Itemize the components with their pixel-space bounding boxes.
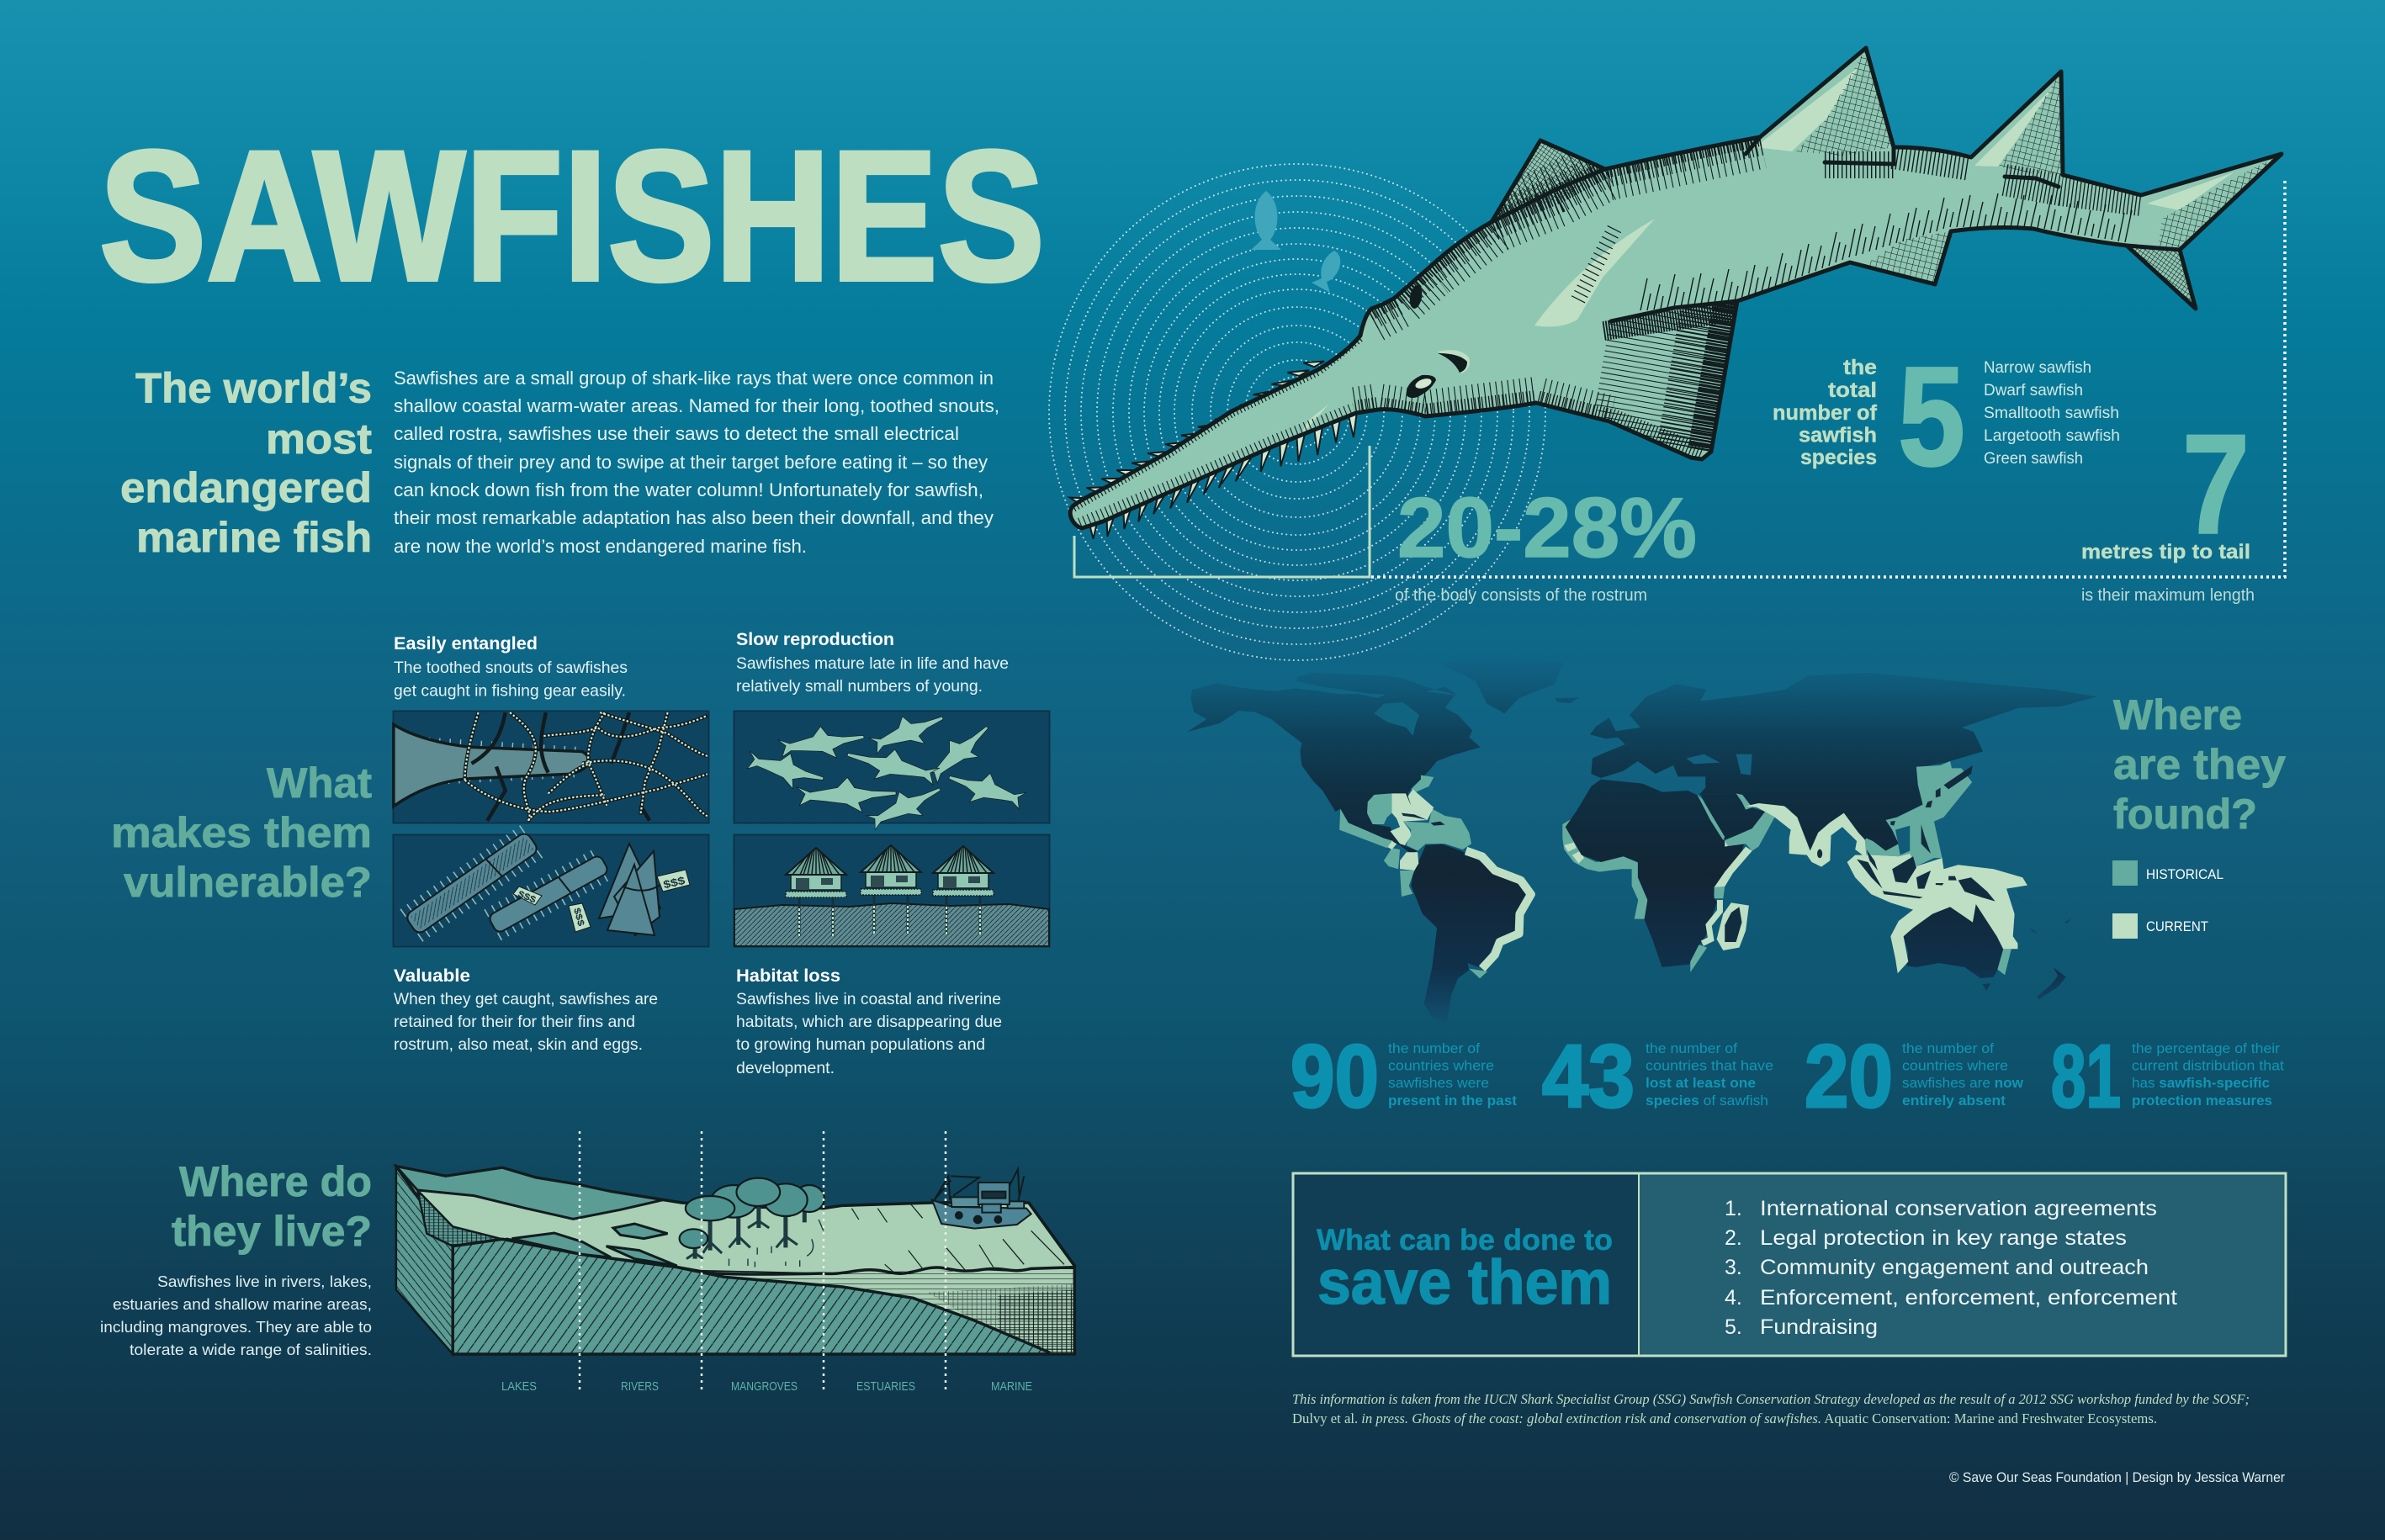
zone labels: MANGROVES [731, 1380, 798, 1394]
species names: Green sawfish [1984, 450, 2083, 468]
text: habitat description [100, 1273, 372, 1358]
text: valuable: rostrum, also meat, skin and eggs. [394, 1035, 643, 1054]
heading: the world's most endangered marine fish [120, 365, 372, 561]
text: habitat description: Sawfishes live in rivers, lakes, [157, 1273, 372, 1290]
action list: 2. [1725, 1226, 1742, 1250]
inland seas [1686, 754, 1752, 775]
action list: Community engagement and outreach [1760, 1256, 2149, 1279]
statistic: 20 countries [1805, 1027, 2023, 1126]
statistic: 20-28% rostrum: 20-28% [1397, 481, 1697, 575]
fishing boat [932, 1169, 1031, 1229]
price tags: $$$ [571, 907, 586, 927]
zone labels: ESTUARIES [856, 1380, 915, 1394]
historical range west [1339, 775, 1650, 978]
icon: small prey fish [1251, 191, 1340, 293]
text: habitat description: estuaries and shallow marine areas, [113, 1295, 372, 1313]
legend: CURRENT [2146, 918, 2208, 934]
statistic: 90 countries: present in the past [1388, 1093, 1518, 1109]
text: habitat loss: Sawfishes live in coastal and riverine [736, 990, 1001, 1008]
severed rostrum one [403, 828, 541, 938]
text: slow reproduction: Slow reproduction [736, 630, 894, 649]
species names: Smalltooth sawfish [1984, 405, 2119, 422]
statistic: 7 metres: metres tip to tail [2081, 541, 2250, 564]
heading: what makes them vulnerable: vulnerable? [124, 859, 372, 906]
diagram: habitat cross-section [396, 1167, 1074, 1354]
statistic: 90 countries: 90 [1291, 1027, 1379, 1126]
text: valuable [394, 966, 658, 1054]
species names [1984, 359, 2120, 468]
statistic: 90 countries: the number of [1388, 1041, 1480, 1056]
statistic: 81 percent [2051, 1027, 2284, 1126]
text: slow reproduction: Sawfishes mature late in life and have [736, 654, 1009, 673]
text: habitat loss: development. [736, 1059, 835, 1077]
eyes and spiracle [1407, 284, 1470, 398]
text: easily entangled [394, 634, 628, 700]
intro text: their most remarkable adaptation has also been their downfall, and they [394, 507, 994, 528]
panel: valuable parts [394, 828, 708, 947]
action list: Fundraising [1760, 1315, 1878, 1339]
statistic: 20 countries: 20 [1805, 1027, 1893, 1126]
world map [1187, 658, 2097, 1022]
zone dividers [580, 1131, 946, 1389]
action list: Legal protection in key range states [1760, 1226, 2127, 1250]
heading: what makes them vulnerable: makes them [111, 809, 372, 856]
fin base lines [1492, 137, 2180, 321]
statistic: 5 species: 5 [1898, 337, 1965, 495]
text: habitat loss: to growing human populations and [736, 1035, 985, 1054]
caribbean islands [1402, 813, 1445, 826]
statistic: 7 metres: 7 [2182, 405, 2250, 564]
action list [1725, 1197, 2177, 1339]
action list: International conservation agreements [1760, 1197, 2157, 1220]
eastern hemisphere [1566, 673, 2097, 999]
cliff [417, 1190, 502, 1246]
heading: the world's most endangered marine fish: marine fish [136, 514, 372, 561]
heading: what makes them vulnerable [111, 759, 372, 906]
measurement bracket and dotted lines [1074, 181, 2285, 577]
price tags: $$$ [662, 874, 687, 891]
species label [1773, 356, 1878, 469]
surface shading strokes [851, 1204, 1064, 1273]
species names: Largetooth sawfish [1984, 427, 2120, 445]
historical range east [1690, 761, 2011, 975]
intro text: are now the world’s most endangered marine fish. [394, 536, 807, 557]
text: habitat description: including mangroves. They are able to [100, 1318, 372, 1336]
text: valuable: retained for their for their fins and [394, 1013, 635, 1031]
species label: number of [1773, 401, 1878, 425]
statistic: 20 countries: countries where [1902, 1058, 2008, 1073]
statistic: 90 countries: sawfishes were [1388, 1076, 1489, 1091]
intro text: shallow coastal warm-water areas. Named for their long, toothed snouts, [394, 395, 999, 416]
shoreline ground [734, 903, 1049, 946]
rostrum in net [394, 724, 589, 807]
source note: Dulvy et al. in press. Ghosts of the coast: global extinction risk and conservation of sawfishes. Aquatic Conservation: Marine and Freshwater Ecosystems. [1292, 1410, 2157, 1426]
species names: Dwarf sawfish [1984, 382, 2083, 400]
statistic: 43 countries: countries that have [1646, 1058, 1773, 1073]
action list: 4. [1725, 1286, 1742, 1310]
surface [396, 1167, 1074, 1274]
bundled fins [599, 844, 665, 935]
stilt huts [786, 845, 994, 936]
source note [1292, 1391, 2250, 1426]
text: valuable: Valuable [394, 966, 470, 986]
sonar rings [1049, 164, 1545, 660]
current range west [1388, 789, 1584, 969]
statistic: 7 metres: is their maximum length [2081, 586, 2255, 605]
body silhouette [1070, 48, 2282, 528]
text: valuable: When they get caught, sawfishes are [394, 990, 658, 1008]
zone labels [501, 1380, 1032, 1394]
panel heading: What can be done to [1317, 1224, 1613, 1257]
statistic: 5 species [1773, 337, 2120, 495]
text: habitat loss [736, 966, 1002, 1077]
pectoral fin hatching [1603, 301, 1737, 459]
ink hatching along edges [1073, 137, 2141, 528]
text: easily entangled: get caught in fishing gear easily. [394, 681, 626, 700]
heading: the world's most endangered marine fish: The world’s [135, 365, 372, 412]
text: habitat loss: habitats, which are disappearing due [736, 1013, 1002, 1031]
text: habitat loss: Habitat loss [736, 966, 840, 986]
statistic: 43 countries [1542, 1027, 1773, 1126]
intro text [394, 368, 999, 557]
text: easily entangled: Easily entangled [394, 634, 538, 654]
fin highlights [1300, 67, 2234, 437]
species label: total [1828, 378, 1877, 402]
statistic: 43 countries: lost at least one [1646, 1076, 1756, 1091]
heading: the world's most endangered marine fish: most [266, 415, 372, 463]
heading: where are they found [2113, 691, 2286, 838]
zone labels: MARINE [991, 1380, 1032, 1394]
left side face [396, 1167, 453, 1354]
panel heading: save them [1317, 1247, 1612, 1317]
statistic: 90 countries: countries where [1388, 1058, 1494, 1073]
heading: what makes them vulnerable: What [267, 759, 372, 807]
text: slow reproduction: relatively small numbers of young. [736, 677, 983, 696]
text: easily entangled: The toothed snouts of sawfishes [394, 659, 628, 677]
species names: Narrow sawfish [1984, 359, 2091, 377]
statistic: 43 countries: species of sawfish [1646, 1093, 1768, 1109]
panel: what can be done [1293, 1173, 2286, 1356]
pacific islands [2010, 892, 2071, 934]
heading: where are they found: Where [2113, 691, 2242, 738]
seabed face [453, 1239, 1050, 1354]
statistic: 20-28% rostrum: of the body consists of the rostrum [1395, 586, 1647, 605]
species label: the [1843, 356, 1877, 379]
roots in shallows [729, 1220, 824, 1267]
action list: 3. [1725, 1256, 1742, 1279]
price tags: $$$ [517, 889, 538, 906]
heading: the world's most endangered marine fish: endangered [120, 464, 372, 511]
statistic: 81 percent: current distribution that [2132, 1058, 2284, 1073]
intro text: can knock down fish from the water column! Unfortunately for sawfish, [394, 479, 983, 500]
heading: where do they live [172, 1158, 372, 1255]
intro text: signals of their prey and to swipe at their target before eating it – so they [394, 452, 988, 473]
intro text: called rostra, sawfishes use their saws to detect the small electrical [394, 423, 959, 444]
statistic: 20 countries: sawfishes are now [1902, 1076, 2023, 1091]
statistic: 90 countries [1291, 1027, 1518, 1126]
saw teeth [1070, 362, 1357, 539]
heading: where are they found: are they [2113, 741, 2286, 788]
school of sawfish [743, 703, 1029, 838]
statistic: 7 metres [2081, 405, 2255, 605]
text: habitat description: tolerate a wide range of salinities. [130, 1341, 372, 1358]
legend: HISTORICAL [2146, 866, 2223, 882]
severed rostrum two [486, 851, 611, 937]
illustration: sawfish [1070, 48, 2282, 539]
legend [2112, 860, 2223, 939]
statistic: 81 percent: protection measures [2132, 1093, 2272, 1109]
statistic: 43 countries: the number of [1646, 1041, 1737, 1056]
americas and atlantic landmasses [1187, 658, 1619, 1022]
current range east [1702, 803, 2027, 973]
islands and dark cutouts [1725, 765, 1995, 942]
statistic: 81 percent: 81 [2051, 1027, 2121, 1126]
statistic: 81 percent: has sawfish-specific [2132, 1076, 2270, 1091]
block edges [453, 1203, 1074, 1354]
heading: where are they found: found? [2113, 791, 2257, 838]
statistic: 20 countries: the number of [1902, 1041, 1994, 1056]
action list: 1. [1725, 1197, 1742, 1220]
panel: habitat loss huts [734, 834, 1050, 947]
panel: entangled net [394, 712, 708, 823]
heading: where do they live: they live? [172, 1208, 372, 1255]
fin crosshatching [1492, 48, 2282, 309]
water face [701, 1267, 1074, 1354]
hudson bay [1374, 702, 1419, 736]
heading: where do they live: Where do [179, 1158, 372, 1205]
text: slow reproduction [736, 630, 1009, 696]
statistic: 81 percent: the percentage of their [2132, 1041, 2281, 1056]
species label: sawfish [1799, 424, 1877, 447]
action list: Enforcement, enforcement, enforcement [1760, 1286, 2177, 1310]
south china sea gap [1895, 826, 1910, 855]
statistic: 43 countries: 43 [1542, 1027, 1635, 1126]
net strands [464, 712, 708, 822]
upland and banks [396, 1167, 677, 1266]
credit: © Save Our Seas Foundation | Design by Jessica Warner [1949, 1469, 2285, 1485]
africa, eurasia and oceania landmasses [1566, 673, 2097, 999]
intro text: Sawfishes are a small group of shark-like rays that were once common in [394, 368, 994, 389]
panel: slow reproduction fish [734, 703, 1050, 838]
price tags [513, 870, 690, 932]
title: SAWFISHES [99, 113, 1045, 320]
zone labels: LAKES [501, 1380, 537, 1394]
zone labels: RIVERS [621, 1380, 659, 1394]
belly hatching [1640, 193, 2132, 310]
fish outline [1070, 48, 2282, 528]
source note: This information is taken from the IUCN Shark Specialist Group (SSG) Sawfish Conservation Strategy developed as the result of a 2012 SSG workshop funded by the SOSF; [1292, 1391, 2250, 1407]
species label: species [1800, 446, 1877, 469]
mangrove trees [680, 1178, 824, 1259]
action list: 5. [1725, 1315, 1742, 1339]
statistic: 20 countries: entirely absent [1902, 1093, 2006, 1109]
